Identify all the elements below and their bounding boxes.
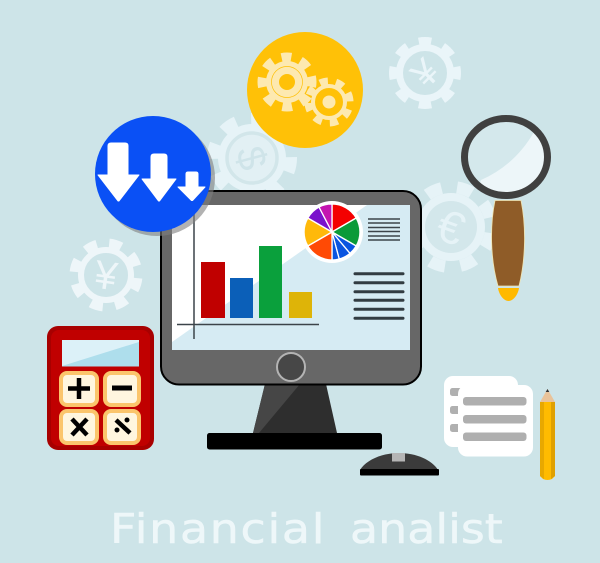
monitor bbox=[161, 191, 421, 450]
button: minus bbox=[105, 373, 139, 405]
icon: euro gear bbox=[400, 176, 502, 278]
lens ring bbox=[464, 118, 548, 196]
button: divide bbox=[105, 411, 139, 443]
power button bbox=[277, 353, 305, 381]
mouse bbox=[360, 453, 439, 476]
back sheet bullets bbox=[450, 388, 462, 432]
button: multiply bbox=[61, 411, 97, 443]
notes papers bbox=[444, 376, 533, 456]
large text lines bbox=[355, 274, 403, 318]
icon: large down arrow bbox=[98, 143, 139, 201]
infographic canvas bbox=[47, 32, 555, 544]
calculator bbox=[47, 326, 154, 450]
front sheet bbox=[458, 385, 533, 456]
small text lines bbox=[368, 219, 400, 240]
icon: yen gear top right bbox=[393, 41, 457, 105]
monitor bezel bbox=[161, 191, 421, 384]
magnifying glass bbox=[464, 118, 560, 301]
title: analist bbox=[350, 506, 503, 553]
yellow circle with gears bbox=[247, 32, 363, 148]
lens bbox=[480, 133, 544, 192]
button: plus bbox=[61, 373, 97, 405]
monitor stand bbox=[253, 384, 337, 433]
pencil bbox=[540, 389, 555, 480]
monitor base bbox=[207, 433, 382, 450]
handle tip bbox=[498, 288, 519, 301]
icon: small gear bbox=[304, 77, 354, 127]
icon: euro gear: € bbox=[430, 198, 472, 256]
icon: dollar gear: $ bbox=[227, 142, 275, 175]
icon: large gear bbox=[262, 57, 312, 107]
bar chart bbox=[177, 205, 319, 339]
title: Financial bbox=[110, 506, 342, 553]
icon: yen gear top right: ¥ bbox=[403, 51, 449, 97]
handle bbox=[492, 200, 525, 286]
blue circle with down arrows bbox=[95, 116, 215, 236]
icon: yen gear left: ¥ bbox=[91, 253, 121, 299]
calculator display bbox=[62, 340, 139, 366]
front sheet lines bbox=[463, 397, 526, 441]
icon: yen gear left bbox=[66, 235, 146, 315]
icon: medium down arrow bbox=[142, 154, 176, 201]
back sheet bbox=[444, 376, 518, 447]
pie chart bbox=[301, 201, 363, 263]
monitor screen bbox=[172, 205, 410, 350]
icon: dollar gear bbox=[207, 113, 297, 203]
icon: small down arrow bbox=[178, 172, 205, 200]
